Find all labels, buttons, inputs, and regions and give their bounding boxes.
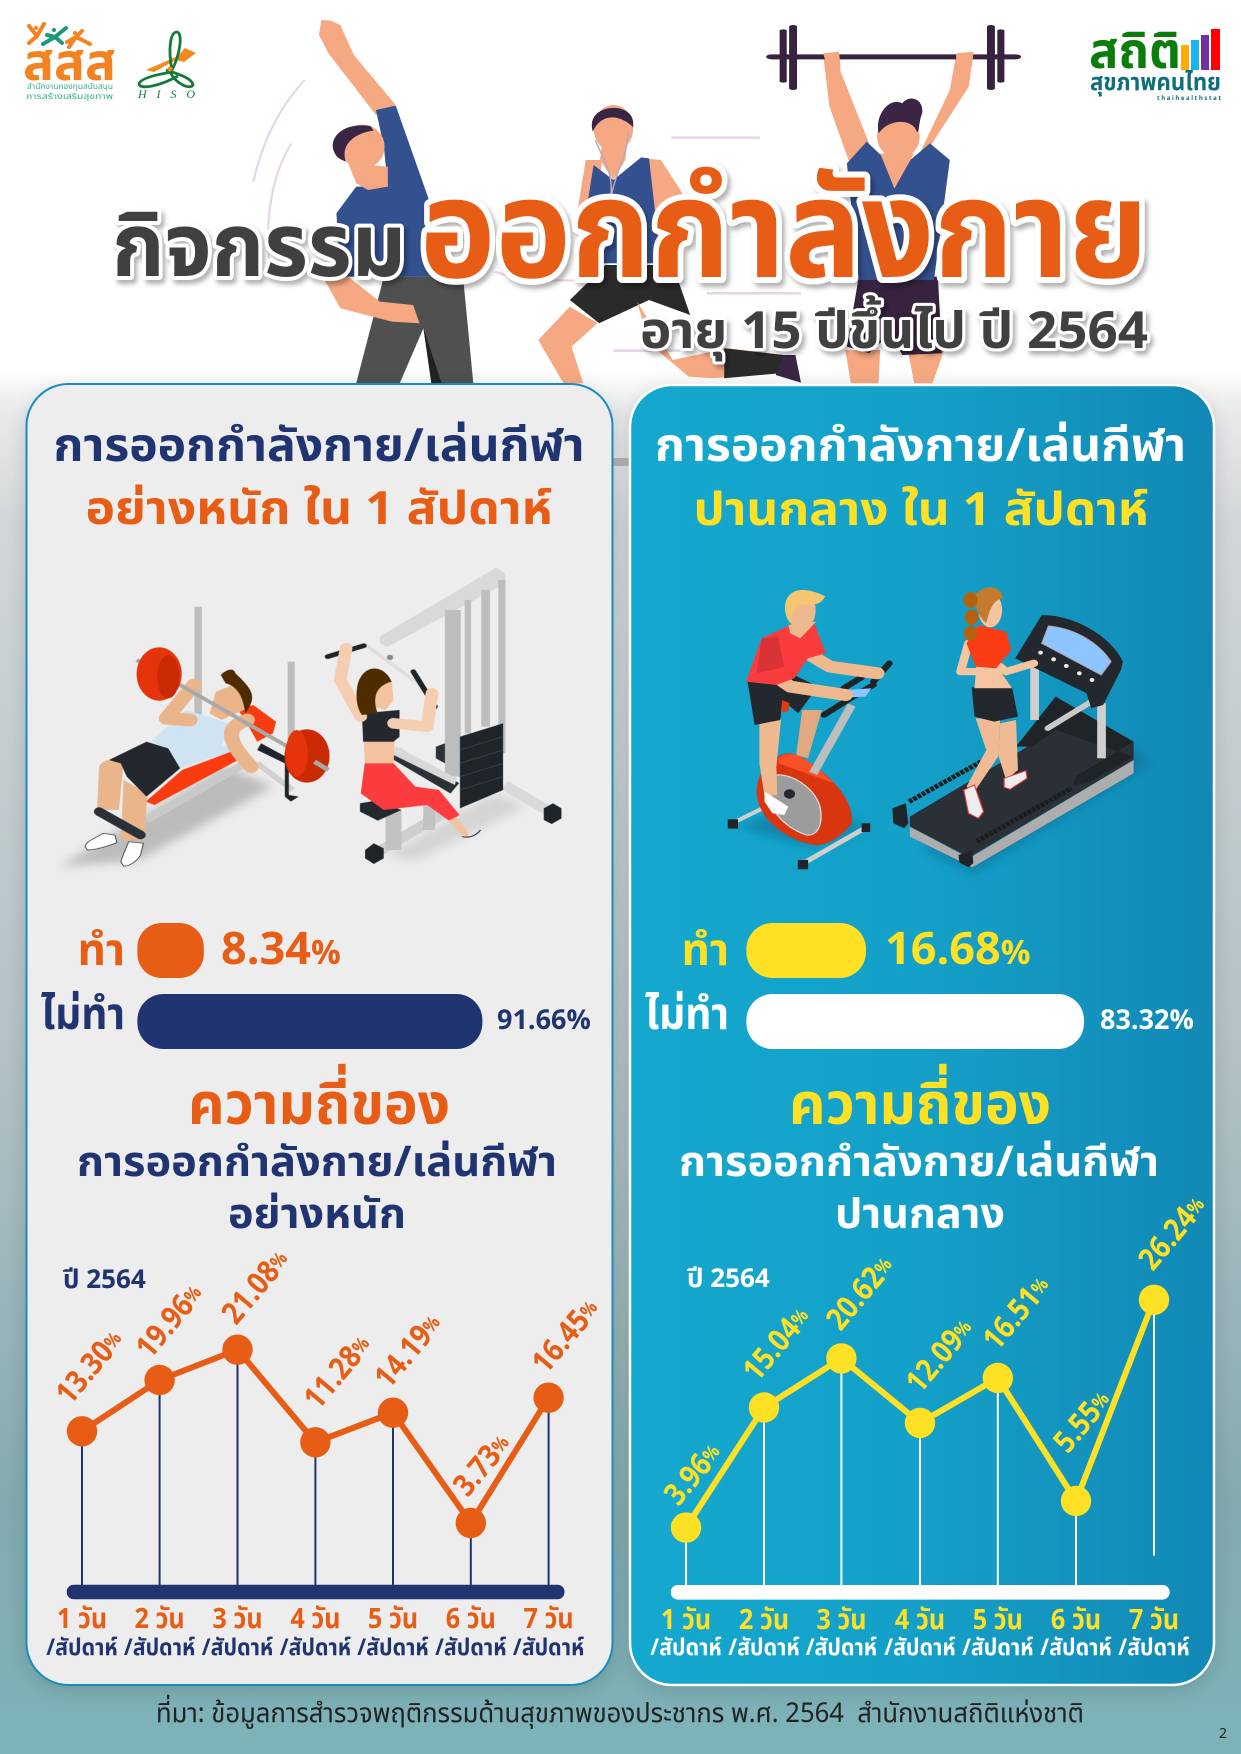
line chart: vigorous frequency: 14.19%	[364, 1304, 455, 1400]
stat: moderate do	[682, 917, 1031, 985]
logo: สถิติสุขภาพคนไทย	[1089, 15, 1221, 103]
logo: สถิติสุขภาพคนไทย: สุขภาพคนไทย	[1090, 65, 1221, 101]
heading: moderate frequency	[679, 1063, 1159, 1247]
line chart: vigorous frequency: 13.30%	[46, 1320, 136, 1416]
line chart: moderate frequency: 6 วัน	[1051, 1600, 1101, 1642]
line chart: moderate frequency: 2 วัน	[739, 1600, 789, 1642]
subtitle: อายุ 15 ปีขึ้นไป ปี 2564	[640, 294, 1148, 371]
line chart: vigorous frequency: 1 วัน	[57, 1599, 107, 1641]
line chart: moderate frequency: 20.62%	[816, 1246, 907, 1342]
title: กิจกรรม	[112, 183, 406, 316]
figure: weightlifter	[766, 25, 1021, 383]
illustration: exercise bike and treadmill	[728, 587, 1151, 873]
logo: สถิติสุขภาพคนไทย: สถิติ	[1089, 15, 1181, 91]
stat: vigorous do: 8.34%	[221, 917, 341, 985]
stat: vigorous not do: 91.66%	[497, 1001, 591, 1042]
stat: moderate not do: 83.32%	[1100, 1001, 1194, 1042]
line chart: moderate frequency: /สัปดาห์	[650, 1630, 722, 1665]
page number: 2	[1219, 1724, 1227, 1745]
line chart: moderate frequency: /สัปดาห์	[884, 1630, 956, 1665]
line chart: moderate frequency: 5 วัน	[973, 1600, 1023, 1642]
icon: three figures	[29, 24, 90, 47]
line chart: vigorous frequency: 3 วัน	[212, 1599, 263, 1641]
line chart: vigorous frequency: /สัปดาห์	[513, 1630, 584, 1665]
line chart: vigorous frequency	[46, 1240, 612, 1665]
line chart: moderate frequency: /สัปดาห์	[728, 1630, 800, 1665]
line chart: moderate frequency: 5.55%	[1043, 1381, 1124, 1464]
line chart: moderate frequency: /สัปดาห์	[1118, 1630, 1190, 1665]
line chart: moderate frequency: /สัปดาห์	[1040, 1630, 1112, 1665]
stat: moderate do: 16.68%	[885, 917, 1031, 985]
line chart: vigorous frequency: /สัปดาห์	[202, 1630, 273, 1665]
heading: moderate	[655, 412, 1186, 546]
stat: moderate not do: ไม่ทำ	[645, 982, 729, 1049]
heading: vigorous frequency	[77, 1063, 557, 1247]
line chart: vigorous frequency: /สัปดาห์	[357, 1630, 429, 1665]
heading: moderate: การออกกำลังกาย/เล่นกีฬา	[655, 412, 1186, 482]
line chart: vigorous frequency: 19.96%	[126, 1274, 216, 1370]
line chart: moderate frequency: 3 วัน	[816, 1600, 866, 1642]
stat: vigorous do	[78, 917, 341, 985]
title: ออกกำลังกาย	[420, 132, 1148, 340]
figure: runner	[538, 105, 801, 383]
line chart: vigorous frequency: 21.08%	[212, 1240, 302, 1336]
panel: vigorous exercise	[26, 384, 612, 1685]
stat: vigorous not do: ไม่ทำ	[41, 982, 125, 1049]
stat: moderate do: ทำ	[682, 918, 729, 985]
line chart: vigorous frequency: 4 วัน	[290, 1599, 340, 1641]
line chart: moderate frequency: /สัปดาห์	[806, 1630, 877, 1665]
source note: ที่มา: ข้อมูลการสำรวจพฤติกรรมด้านสุขภาพของประชากร พ.ศ. 2564 สำนักงานสถิติแห่งชาติ	[156, 1694, 1084, 1735]
heading: vigorous: อย่างหนัก ใน 1 สัปดาห์	[86, 475, 552, 545]
line chart: moderate frequency: 7 วัน	[1129, 1600, 1179, 1642]
line chart: moderate frequency: /สัปดาห์	[962, 1630, 1034, 1665]
heading: vigorous frequency: การออกกำลังกาย/เล่นกีฬา	[77, 1131, 557, 1195]
icon: barbell	[766, 25, 1021, 90]
logo: สถิติสุขภาพคนไทย: thaihealthstat	[1157, 94, 1221, 103]
logo: สสส: การสร้างเสริมสุขภาพ	[26, 91, 114, 103]
logo: สสส: สำนักงานกองทุนสนับสนุน	[27, 81, 113, 93]
heading: moderate frequency: ปานกลาง	[835, 1183, 1005, 1247]
line chart: moderate frequency: 12.09%	[896, 1309, 986, 1404]
line chart: moderate frequency	[650, 1186, 1219, 1665]
heading: vigorous: การออกกำลังกาย/เล่นกีฬา	[54, 412, 584, 482]
line chart: vigorous frequency: 2 วัน	[135, 1599, 185, 1641]
icon: rising colour bars	[1181, 29, 1220, 70]
heading: vigorous frequency: อย่างหนัก	[228, 1183, 406, 1247]
logo: HISO	[137, 32, 196, 101]
label: year: ปี 2564	[687, 1259, 770, 1299]
line chart: vigorous frequency: /สัปดาห์	[280, 1630, 351, 1665]
heading: moderate frequency: ความถี่ของ	[789, 1063, 1051, 1151]
line chart: moderate frequency: 4 วัน	[895, 1600, 945, 1642]
heading: vigorous frequency: ความถี่ของ	[188, 1063, 450, 1151]
label: year: ปี 2564	[63, 1260, 146, 1300]
line chart: vigorous frequency: 5 วัน	[368, 1599, 418, 1641]
logo: HISO: H I S O	[137, 87, 195, 101]
title	[112, 132, 1148, 340]
line chart: vigorous frequency: 16.45%	[522, 1289, 612, 1385]
line chart: vigorous frequency: 3.73%	[443, 1424, 524, 1508]
line chart: vigorous frequency: /สัปดาห์	[46, 1630, 118, 1665]
heading: moderate frequency: การออกกำลังกาย/เล่นกีฬา	[679, 1131, 1159, 1195]
figure: stretching man	[319, 20, 473, 383]
line chart: vigorous frequency: 6 วัน	[446, 1599, 496, 1641]
line chart: vigorous frequency: 11.28%	[294, 1325, 384, 1421]
line chart: moderate frequency: 1 วัน	[661, 1600, 711, 1642]
stat: vigorous do: ทำ	[78, 918, 125, 985]
line chart: moderate frequency: 15.04%	[733, 1297, 823, 1393]
heading: vigorous	[54, 412, 584, 545]
heading: moderate: ปานกลาง ใน 1 สัปดาห์	[694, 476, 1148, 546]
line chart: vigorous frequency: 7 วัน	[524, 1599, 574, 1641]
line chart: moderate frequency: 16.51%	[973, 1266, 1063, 1362]
line chart: moderate frequency: 3.96%	[654, 1433, 735, 1517]
panel shadows	[26, 390, 1214, 1690]
stat: vigorous not do	[41, 982, 591, 1049]
stat: moderate not do	[645, 982, 1194, 1049]
line chart: vigorous frequency: /สัปดาห์	[435, 1630, 507, 1665]
logo: สสส: สสส	[23, 26, 116, 104]
panel: moderate exercise	[630, 385, 1219, 1685]
illustration: bench press and lat pulldown	[60, 567, 562, 867]
line chart: moderate frequency: 26.24%	[1129, 1186, 1219, 1282]
line chart: vigorous frequency: /สัปดาห์	[124, 1630, 195, 1665]
illustration: three exercising people	[253, 20, 1021, 383]
